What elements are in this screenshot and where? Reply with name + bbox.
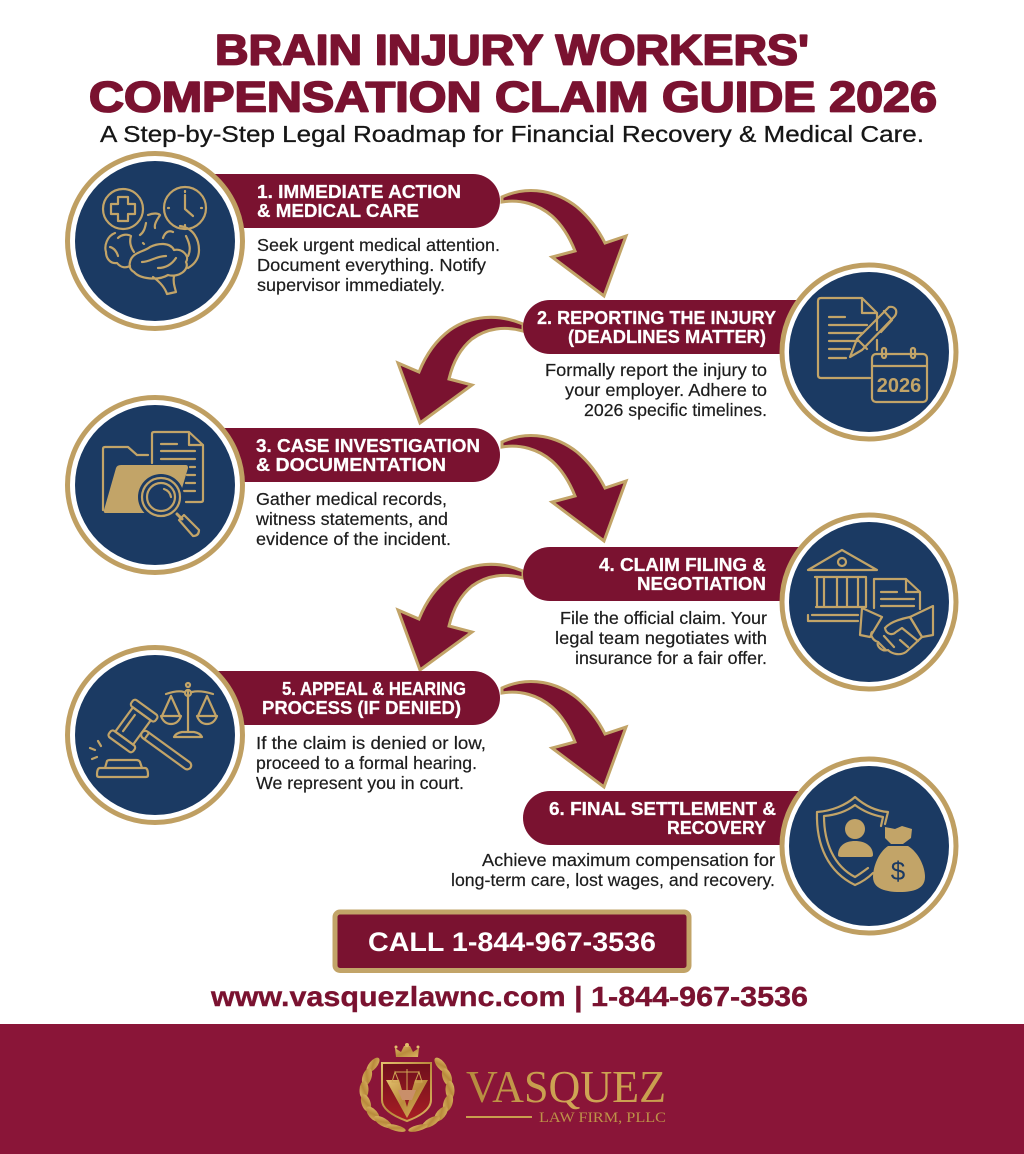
- step 4 text: [555, 608, 767, 668]
- step 4 heading pill: [523, 547, 830, 601]
- step 1 heading pill: & MEDICAL CARE: [257, 200, 419, 221]
- step 6 heading pill: [523, 791, 830, 845]
- step 3 heading pill: 3. CASE INVESTIGATION: [256, 435, 480, 456]
- website and phone: www.vasquezlawnc.com | 1-844-967-3536: [210, 981, 808, 1012]
- icon: gavel and scales of justice: [68, 648, 242, 822]
- step 4 text: insurance for a fair offer.: [575, 648, 767, 668]
- title: BRAIN INJURY WORKERS': [215, 26, 809, 74]
- step 6 text: long-term care, lost wages, and recovery.: [451, 870, 775, 890]
- icon: document, pen and 2026 calendar: 2026: [877, 375, 921, 397]
- step 3 text: [255, 489, 451, 549]
- title: COMPENSATION CLAIM GUIDE 2026: [89, 74, 937, 122]
- logo emblem: crown, shield and wreath: [359, 1043, 455, 1133]
- logo wordmark: VASQUEZ: [466, 1061, 666, 1112]
- step 5 text: If the claim is denied or low,: [256, 733, 486, 753]
- step 2 text: your employer. Adhere to: [565, 380, 767, 400]
- icon: folder, document and magnifying glass: [68, 398, 242, 572]
- step 2 heading pill: (DEADLINES MATTER): [568, 326, 766, 347]
- icon: shield with person and money bag: [782, 759, 956, 933]
- icon: document, pen and 2026 calendar: [782, 265, 956, 439]
- step 6 text: [451, 850, 775, 890]
- step 4 heading pill: NEGOTIATION: [637, 573, 766, 594]
- step 6 heading pill: RECOVERY: [667, 817, 767, 838]
- footer band: [0, 1024, 1024, 1154]
- arrow: step 4 to step 5: [398, 564, 523, 670]
- step 5 heading pill: 5. APPEAL & HEARING: [282, 678, 466, 699]
- step 4 text: legal team negotiates with: [555, 628, 767, 648]
- step 2 heading pill: [523, 300, 830, 354]
- panel: step 6: [451, 759, 956, 933]
- step 3 text: witness statements, and: [255, 509, 448, 529]
- step 2 text: [545, 360, 767, 420]
- icon: shield with person and money bag: $: [891, 856, 906, 886]
- arrow: step 2 to step 3: [398, 317, 523, 423]
- step 3 heading pill: & DOCUMENTATION: [256, 454, 446, 475]
- step 3 text: Gather medical records,: [256, 489, 447, 509]
- panel: step 3: [68, 398, 500, 572]
- call to action button: [335, 912, 689, 970]
- call to action button: CALL 1-844-967-3536: [368, 927, 656, 957]
- logo: Vasquez Law Firm: [359, 1043, 666, 1133]
- step 5 heading pill: [200, 671, 500, 725]
- step 2 text: 2026 specific timelines.: [584, 400, 767, 420]
- step 2 text: Formally report the injury to: [545, 360, 767, 380]
- step 5 heading pill: PROCESS (IF DENIED): [262, 697, 461, 718]
- arrow: step 1 to step 2: [502, 190, 626, 296]
- icon: brain with medical cross and clock: [68, 154, 242, 328]
- step 6 text: Achieve maximum compensation for: [482, 850, 775, 870]
- step 4 text: File the official claim. Your: [560, 608, 767, 628]
- step 4 heading pill: 4. CLAIM FILING &: [599, 554, 766, 575]
- step 1 text: supervisor immediately.: [257, 275, 445, 295]
- panel: step 1: [68, 154, 500, 328]
- subtitle: A Step-by-Step Legal Roadmap for Financial Recovery & Medical Care.: [100, 121, 924, 147]
- step 5 text: proceed to a formal hearing.: [256, 753, 477, 773]
- step 3 text: evidence of the incident.: [256, 529, 451, 549]
- arrow: step 5 to step 6: [502, 681, 626, 787]
- panel: step 2: [523, 265, 956, 439]
- step 1 text: [257, 235, 500, 295]
- step 5 text: [256, 733, 486, 793]
- step 1 text: Seek urgent medical attention.: [257, 235, 500, 255]
- step 3 heading pill: [200, 428, 500, 482]
- logo wordmark: LAW FIRM, PLLC: [539, 1110, 666, 1126]
- panel: step 5: [68, 648, 500, 822]
- step 5 text: We represent you in court.: [256, 773, 464, 793]
- step 1 heading pill: 1. IMMEDIATE ACTION: [257, 181, 461, 202]
- step 1 heading pill: [200, 174, 500, 228]
- icon: courthouse, document and handshake: [782, 515, 956, 689]
- step 6 heading pill: 6. FINAL SETTLEMENT &: [549, 798, 776, 819]
- step 1 text: Document everything. Notify: [257, 255, 486, 275]
- title: [89, 26, 937, 122]
- arrow: step 3 to step 4: [502, 435, 626, 541]
- panel: step 4: [523, 515, 956, 689]
- step 2 heading pill: 2. REPORTING THE INJURY: [537, 307, 777, 328]
